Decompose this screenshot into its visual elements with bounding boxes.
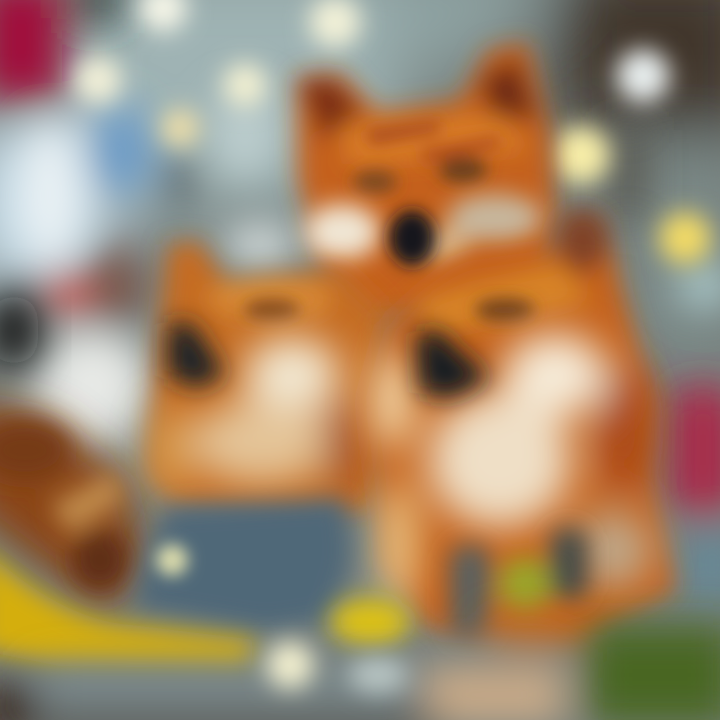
dog: lower left partial bbox=[0, 400, 140, 610]
dog: middle left bbox=[148, 240, 385, 515]
blue cushion bbox=[135, 498, 350, 630]
dog: front right bbox=[365, 208, 675, 640]
dog: back, top center bbox=[296, 42, 555, 320]
bokeh lights bbox=[74, 0, 711, 264]
foreground: yellow shapes and table bbox=[0, 545, 720, 720]
